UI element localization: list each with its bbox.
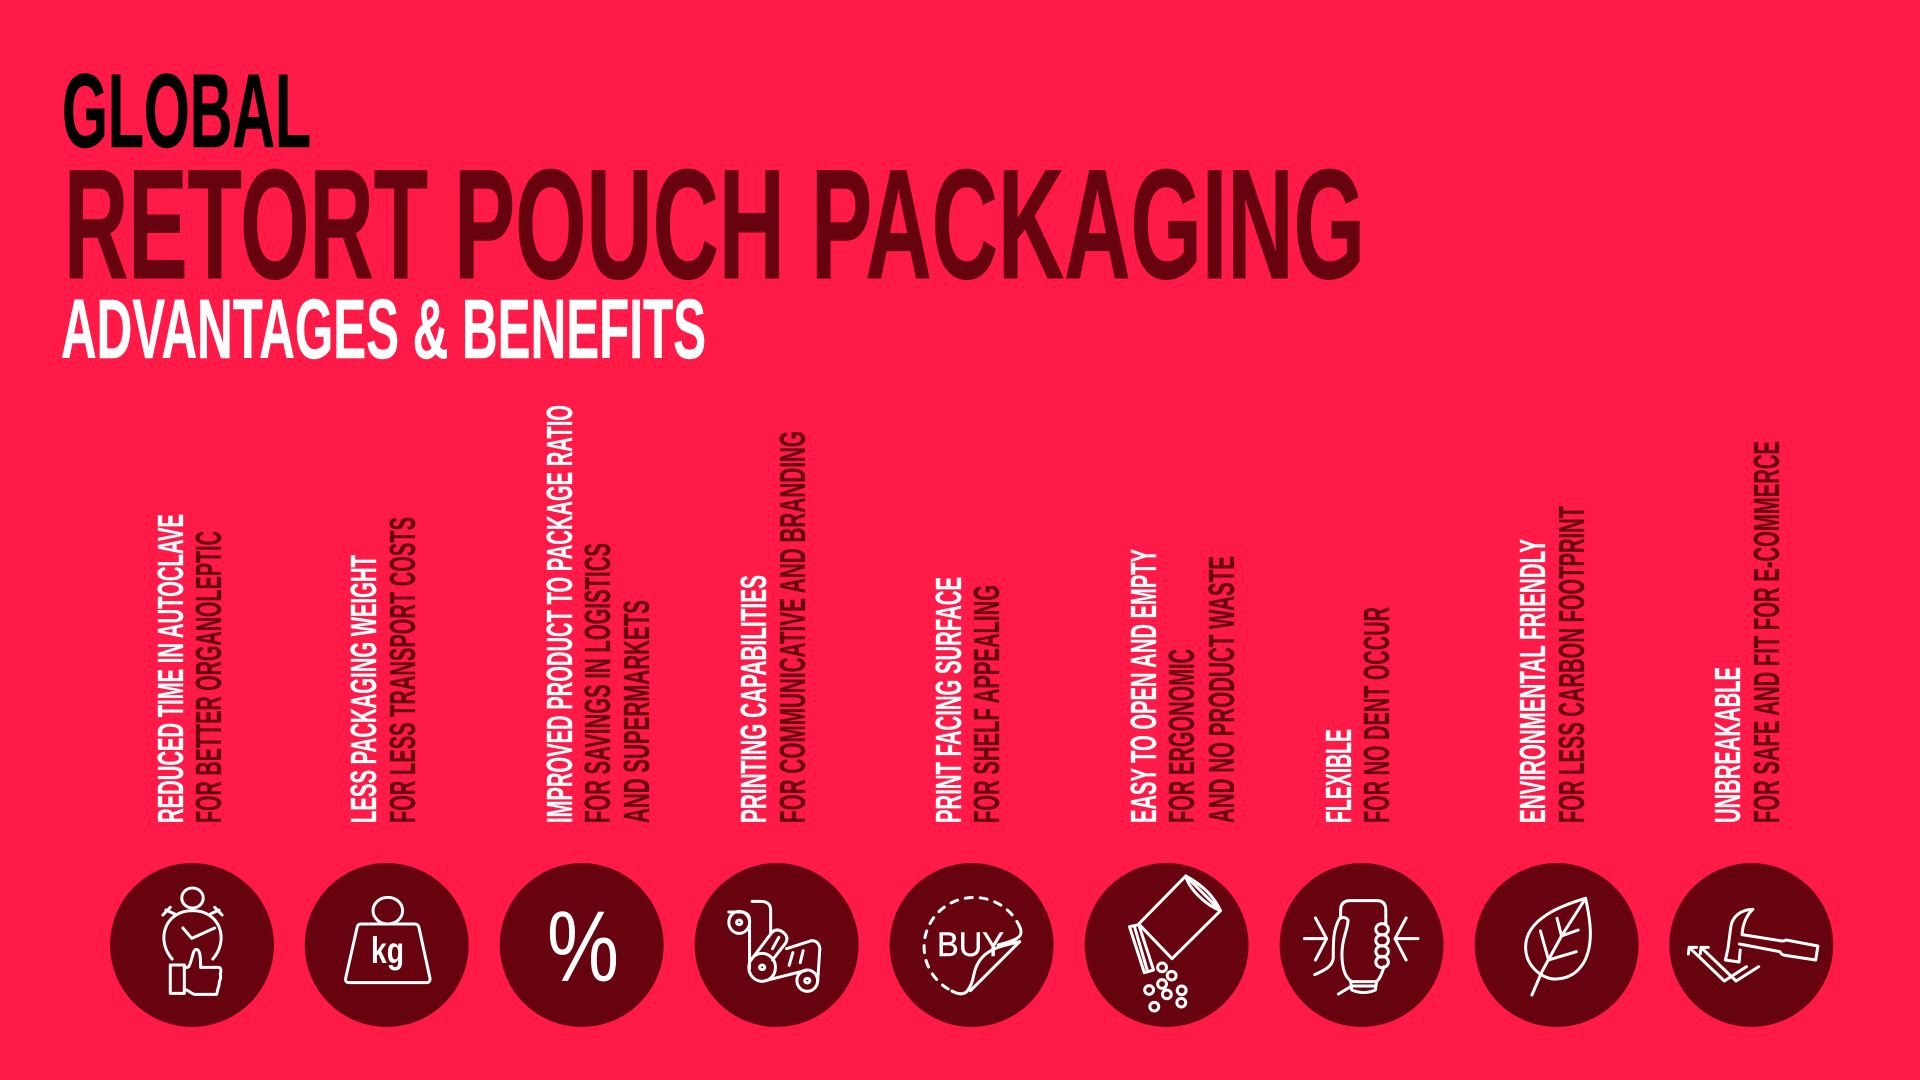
heading: GLOBAL: GLOBAL [62, 53, 311, 170]
benefit 8: environmental [1475, 506, 1639, 1027]
buy label: BUY [937, 926, 1004, 964]
subheading: ADVANTAGES & BENEFITS: ADVANTAGES & BENEFITS [61, 282, 706, 376]
title block [61, 53, 1365, 376]
benefit text [1707, 441, 1787, 823]
heading: RETORT POUCH PACKAGING: PACKAGING [811, 138, 1365, 312]
benefit title: EASY TO OPEN AND EMPTY [1123, 549, 1164, 823]
benefit detail: FOR LESS TRANSPORT COSTS [382, 517, 423, 823]
benefit title: IMPROVED PRODUCT TO PACKAGE RATIO [539, 405, 580, 823]
icon: kg weight [305, 863, 469, 1027]
benefit detail second line: AND NO PRODUCT WASTE [1201, 556, 1242, 823]
benefit detail: FOR COMMUNICATIVE AND BRANDING [772, 431, 813, 823]
heading: RETORT POUCH PACKAGING [64, 138, 1365, 312]
benefit 3: product to package ratio [500, 405, 664, 1027]
benefit title: ENVIRONMENTAL FRIENDLY [1512, 539, 1553, 823]
benefit text [150, 514, 229, 823]
percent sign: % [547, 891, 619, 1003]
benefit detail: FOR SHELF APPEALING [966, 585, 1007, 823]
benefit detail: FOR LESS CARBON FOOTPRINT [1551, 506, 1592, 823]
benefit title: UNBREAKABLE [1707, 667, 1748, 823]
benefit title: PRINTING CAPABILITIES [733, 575, 774, 823]
benefit detail: FOR NO DENT OCCUR [1356, 607, 1397, 823]
benefit detail second line: AND SUPERMARKETS [616, 600, 657, 823]
benefit text [733, 431, 813, 823]
benefit detail: FOR ERGONOMIC [1161, 649, 1202, 823]
icon: percent [500, 863, 664, 1027]
icon: squeezed pouch [1280, 863, 1444, 1027]
benefit detail: FOR SAVINGS IN LOGISTICS [577, 543, 618, 823]
icon: stopwatch and thumbs up [110, 863, 274, 1027]
benefit title: REDUCED TIME IN AUTOCLAVE [150, 514, 191, 823]
benefit text [1123, 549, 1242, 823]
benefit title: PRINT FACING SURFACE [928, 577, 969, 823]
icon: buy sticker [890, 863, 1054, 1027]
benefit 5: print facing surface [890, 577, 1054, 1027]
benefit text [343, 517, 423, 823]
benefit detail: FOR SAFE AND FIT FOR E-COMMERCE [1746, 441, 1787, 823]
benefit 2: less weight [305, 517, 469, 1027]
benefit 9: unbreakable [1669, 441, 1833, 1027]
benefit title: FLEXIBLE [1318, 729, 1359, 823]
benefit text [539, 405, 657, 823]
icon: hammer and arrows [1669, 863, 1833, 1027]
icon: printing rolls [695, 863, 859, 1027]
benefit 7: flexible [1280, 607, 1444, 1027]
benefit text [928, 577, 1007, 823]
benefit text [1318, 607, 1397, 823]
benefit text [1512, 506, 1592, 823]
heading: RETORT POUCH PACKAGING: RETORT [64, 138, 428, 312]
benefit 4: printing capabilities [695, 431, 859, 1027]
icon: pouring pouch [1085, 863, 1249, 1027]
benefit 1: reduced time [110, 514, 274, 1027]
kg label: kg [371, 930, 404, 971]
benefit 6: easy to open [1085, 549, 1249, 1027]
benefit title: LESS PACKAGING WEIGHT [343, 555, 384, 823]
heading: RETORT POUCH PACKAGING: POUCH [454, 138, 785, 312]
icon: leaf [1475, 863, 1639, 1027]
benefit detail: FOR BETTER ORGANOLEPTIC [188, 531, 229, 823]
